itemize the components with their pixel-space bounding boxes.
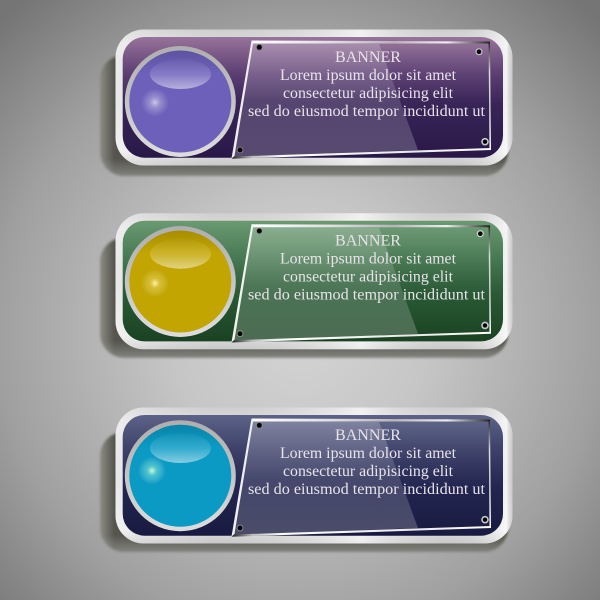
banner text: BANNER <box>335 233 402 250</box>
drop shadow <box>100 238 508 358</box>
silver frame <box>116 408 512 544</box>
plate screws <box>237 228 489 337</box>
banner text <box>248 427 486 498</box>
banner text: sed do eiusmod tempor incididunt ut <box>248 287 486 304</box>
banner text <box>248 233 486 304</box>
silver frame <box>116 213 512 349</box>
silver frame <box>116 30 512 166</box>
banner: navy <box>100 408 512 552</box>
glossy sphere: yellow <box>125 226 236 337</box>
banner text: sed do eiusmod tempor incididunt ut <box>248 481 486 498</box>
banner text: Lorem ipsum dolor sit amet <box>280 445 457 462</box>
banner text: BANNER <box>335 427 402 444</box>
plate screws <box>237 422 489 531</box>
drop shadow <box>100 432 508 552</box>
drop shadow <box>100 55 508 176</box>
banner text: consectetur adipisicing elit <box>283 85 454 102</box>
glossy sphere: violet <box>125 46 236 157</box>
banner: purple <box>100 30 512 176</box>
glass plate <box>232 40 491 159</box>
banner text <box>248 49 486 120</box>
coloured panel <box>123 37 503 158</box>
banner text: sed do eiusmod tempor incididunt ut <box>248 103 486 120</box>
plate screws <box>237 44 489 153</box>
glass plate <box>232 418 491 537</box>
banner text: BANNER <box>335 49 402 66</box>
coloured panel <box>123 415 503 536</box>
banner: green <box>100 213 512 358</box>
glass plate <box>232 224 491 342</box>
coloured panel <box>123 221 503 341</box>
banner text: Lorem ipsum dolor sit amet <box>280 251 457 268</box>
banner text: consectetur adipisicing elit <box>283 463 454 480</box>
glossy sphere: blue <box>125 420 236 531</box>
banner text: Lorem ipsum dolor sit amet <box>280 67 457 84</box>
banner text: consectetur adipisicing elit <box>283 269 454 286</box>
